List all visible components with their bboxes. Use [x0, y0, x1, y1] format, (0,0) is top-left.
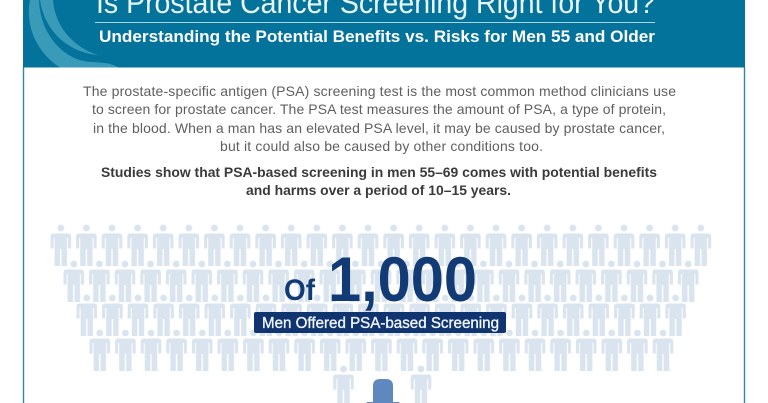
row 1 of men	[48, 223, 714, 269]
row 2 of men	[61, 259, 701, 305]
label: men offered screening: Men Offered PSA-based Screening	[262, 315, 499, 332]
key finding statement: and harms over a period of 10–15 years.	[246, 182, 511, 198]
arrow pointing down	[366, 379, 400, 403]
pictogram: 1,000 men	[48, 223, 714, 403]
headline: Of 1,000: Of	[284, 274, 316, 307]
header banner	[23, 0, 745, 68]
intro paragraph: in the blood. When a man has an elevated PSA level, it may be caused by prostate cancer,	[93, 120, 665, 136]
row 5 men flanking arrow	[333, 366, 431, 403]
decorative swirl	[29, 0, 118, 68]
row 4 of men	[87, 328, 676, 374]
row 3 of men	[74, 293, 688, 339]
subtitle: Understanding the Potential Benefits vs. Risks for Men 55 and Older	[99, 27, 655, 46]
key finding statement: Studies show that PSA-based screening in men 55–69 comes with potential benefits	[101, 164, 657, 180]
intro paragraph: to screen for prostate cancer. The PSA test measures the amount of PSA, a type of protein,	[92, 101, 666, 117]
intro paragraph: but it could also be caused by other conditions too.	[220, 138, 543, 154]
intro paragraph	[83, 83, 676, 154]
intro paragraph: The prostate-specific antigen (PSA) screening test is the most common method clinicians use	[83, 83, 676, 99]
key finding statement	[101, 164, 657, 198]
title rule	[95, 22, 655, 23]
headline: Of 1,000: 1,000	[328, 245, 477, 315]
panel frame	[24, 67, 744, 403]
